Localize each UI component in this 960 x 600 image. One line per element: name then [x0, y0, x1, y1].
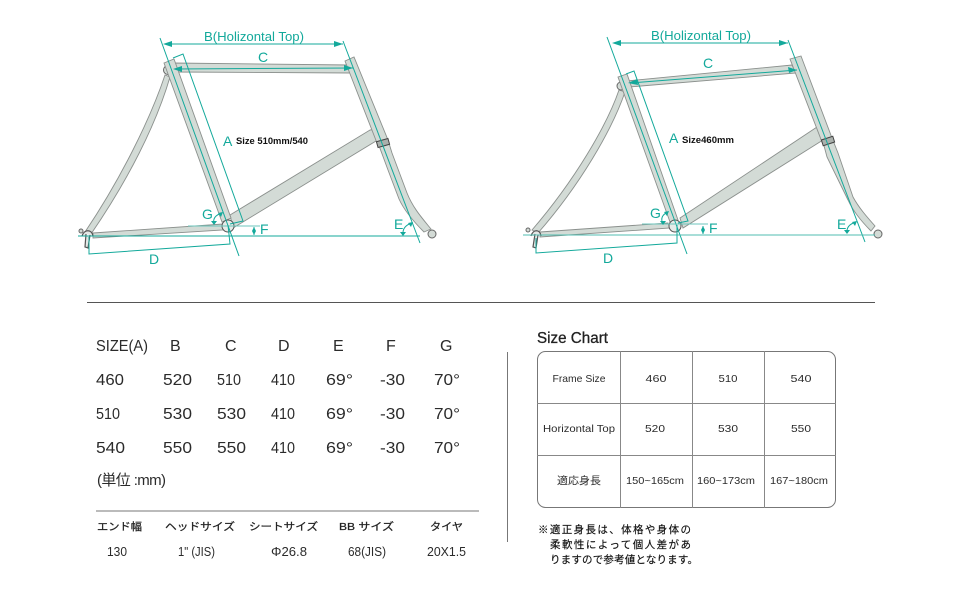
header row: F [386, 338, 396, 355]
front dropout [428, 230, 436, 238]
dimension D bracket [536, 225, 677, 253]
fork [823, 138, 875, 231]
label D: D [603, 250, 613, 266]
footnote: 柔軟性によって個人差があ [550, 538, 691, 551]
row 460 [96, 372, 460, 389]
seat axis line [160, 38, 239, 256]
row 540: 410 [271, 440, 295, 457]
offset F arrow [252, 227, 256, 235]
row 510: 530 [163, 406, 192, 423]
label C: C [258, 49, 268, 65]
row 540: -30 [380, 440, 405, 457]
spec values: Φ26.8 [271, 544, 307, 559]
label G: G [202, 206, 213, 222]
spec labels: エンド幅 [97, 520, 142, 533]
label F: F [709, 220, 718, 236]
size chart heading: Size Chart [537, 330, 609, 347]
seat tube [164, 59, 231, 222]
row 510: 69° [326, 406, 353, 423]
front dropout [874, 230, 882, 238]
specification table [97, 520, 466, 559]
seat stay [85, 75, 170, 234]
fork crown [376, 138, 390, 148]
head axis line [788, 40, 865, 242]
top tube [627, 65, 796, 87]
row 460: 460 [96, 372, 124, 389]
header row: C [225, 338, 237, 355]
angle G arc [660, 211, 669, 225]
spec labels: シートサイズ [249, 520, 318, 533]
head tube [345, 57, 388, 143]
ground line [523, 234, 875, 236]
bottom bracket level line [188, 225, 260, 227]
row 540 [96, 440, 460, 457]
table grid [537, 351, 836, 508]
section divider [87, 302, 875, 304]
dropout bolt [526, 228, 530, 232]
chain stay [540, 223, 670, 237]
dimension C arrow [628, 67, 797, 85]
spec values: 1" (JIS) [178, 544, 215, 559]
header row: E [333, 338, 344, 355]
label D: D [149, 251, 159, 267]
row 540: 540 [96, 440, 125, 457]
specification rule [96, 510, 479, 512]
footnote [538, 523, 698, 566]
head tube [790, 56, 832, 142]
row 460: 70° [434, 372, 460, 389]
head axis line [343, 41, 420, 243]
diagram: frame size 510/540 [78, 29, 436, 267]
bottom bracket level line [642, 223, 708, 225]
dimension A outline [626, 71, 688, 223]
row frame size: 460 [646, 373, 667, 385]
label F: F [260, 221, 269, 237]
bottom bracket [222, 220, 234, 232]
row 510: 530 [217, 406, 246, 423]
spec values: 68(JIS) [348, 544, 386, 559]
header row: SIZE(A) [96, 338, 148, 355]
seat stay [532, 90, 625, 233]
row 460: 510 [217, 372, 241, 389]
row horizontal top: 520 [645, 423, 665, 435]
bottom bracket [669, 220, 681, 232]
offset F arrow [701, 226, 705, 234]
seat cluster [164, 66, 172, 74]
ground line [78, 235, 420, 237]
spec labels: ヘッドサイズ [165, 520, 235, 533]
row 540: 550 [163, 440, 192, 457]
dropout bolt [79, 229, 83, 233]
row 510: 410 [271, 406, 295, 423]
footnote: ※適正身長は、体格や身体の [538, 523, 691, 536]
spec labels: タイヤ [430, 521, 463, 533]
row recommended height [557, 474, 828, 487]
row recommended height: 150~165cm [626, 475, 684, 487]
spec labels: BB サイズ [339, 520, 394, 533]
label B: B(Holizontal Top) [204, 29, 304, 44]
angle E arc [400, 222, 413, 236]
size chart table [537, 351, 836, 508]
spec values: 130 [107, 544, 127, 559]
row frame size: 540 [790, 373, 812, 385]
angle G arc [211, 212, 223, 225]
vertical divider [506, 352, 508, 542]
row 510: -30 [380, 406, 405, 423]
row frame size: 510 [718, 373, 738, 385]
header row: D [278, 338, 290, 355]
row 460: 410 [271, 372, 295, 389]
seat axis line [607, 37, 687, 254]
dimension B arrow [163, 41, 343, 47]
label E: E [837, 216, 846, 232]
fork [378, 140, 431, 232]
row 510 [96, 406, 460, 423]
row recommended height: 167~180cm [770, 475, 828, 487]
unit note: (単位 :mm) [97, 472, 166, 489]
seat tube [618, 74, 678, 222]
row 510: 70° [434, 406, 460, 423]
spec labels [97, 520, 463, 533]
spec values: 20X1.5 [427, 544, 466, 559]
row recommended height: 適応身長 [557, 474, 602, 487]
row 460: 520 [163, 372, 192, 389]
label A: A [669, 130, 679, 146]
fork crown [821, 136, 835, 146]
rear dropout [82, 231, 93, 248]
header row [96, 338, 452, 355]
row recommended height: 160~173cm [697, 475, 755, 487]
table frame [538, 352, 836, 508]
row 460: 69° [326, 372, 353, 389]
geometry table [96, 338, 460, 489]
label B: B(Holizontal Top) [651, 28, 751, 43]
row 540: 550 [217, 440, 246, 457]
row frame size [552, 373, 812, 385]
row horizontal top: Horizontal Top [543, 423, 615, 435]
row 510: 510 [96, 406, 120, 423]
down tube [680, 126, 827, 228]
spec values [107, 544, 466, 559]
dimension A outline [173, 54, 243, 224]
label C: C [703, 55, 713, 71]
footnote: りますので参考値となります。 [550, 553, 698, 566]
dimension C arrow [173, 65, 353, 72]
chain stay [93, 224, 223, 238]
label E: E [394, 216, 403, 232]
row 540: 70° [434, 440, 460, 457]
row horizontal top: 530 [718, 423, 738, 435]
row horizontal top: 550 [791, 423, 811, 435]
angle E arc [844, 221, 857, 234]
size note: Size460mm [682, 135, 734, 145]
seat cluster [617, 82, 625, 90]
label G: G [650, 205, 661, 221]
row frame size: Frame Size [552, 373, 606, 385]
rear dropout [531, 231, 541, 248]
row 540: 69° [326, 440, 353, 457]
label A: A [223, 133, 233, 149]
size note: Size 510mm/540 [236, 136, 308, 146]
down tube [230, 130, 378, 228]
header row: G [440, 338, 452, 355]
header row: B [170, 338, 181, 355]
dimension B arrow [612, 40, 788, 46]
row 460: -30 [380, 372, 405, 389]
top tube [172, 63, 352, 73]
dimension D bracket [89, 225, 230, 254]
diagram: frame size 460 [523, 28, 882, 266]
row horizontal top [543, 423, 811, 435]
